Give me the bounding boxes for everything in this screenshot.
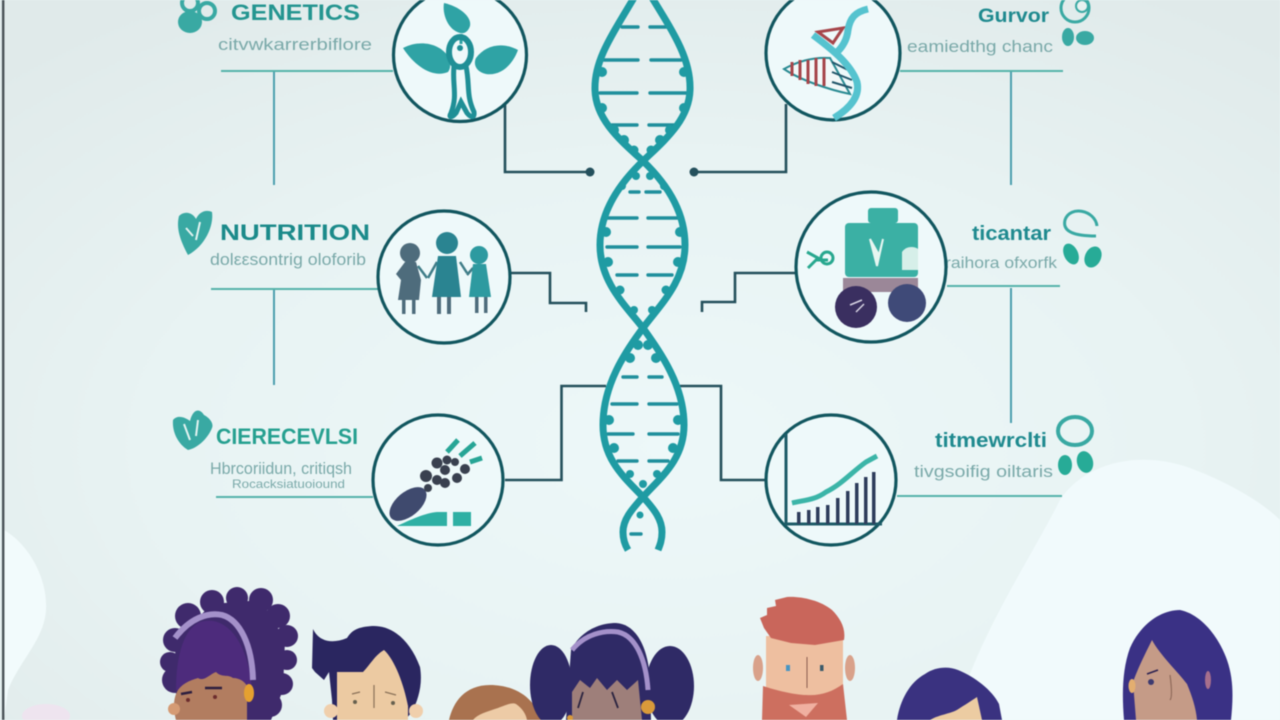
- heading: genetics: GENETICS: [231, 0, 360, 25]
- panel: bottom right label: [766, 415, 1096, 545]
- panel: genetics: [178, 0, 526, 122]
- panel: middle right label: [796, 192, 1105, 342]
- circle: family figures: [378, 211, 510, 343]
- icon: ring and leaves: [1061, 0, 1094, 46]
- background blob: left: [4, 530, 46, 720]
- person: red beard: [753, 597, 855, 720]
- icon: nutrition heart: [178, 211, 212, 255]
- background smudge: pink: [22, 704, 70, 720]
- person: dark quiff: [312, 626, 423, 720]
- heading: gurvor: Gurvor: [978, 6, 1050, 27]
- heading: ticantar: ticantar: [972, 223, 1051, 245]
- person: short dark hair: [897, 668, 1002, 720]
- icon: ring and leaves: [1060, 211, 1105, 270]
- person: two buns: [530, 623, 694, 720]
- text: description: tivgsoifig oiltaris: [914, 462, 1053, 481]
- person: long dark hair: [1123, 610, 1232, 720]
- person: curly purple hair: [160, 587, 298, 720]
- heading: ciereceulsi: CIERECEVLSI: [216, 424, 358, 449]
- icon: leafy heart: [173, 411, 213, 450]
- connector lines: [211, 71, 1063, 497]
- heading: titmewrclti: titmewrclti: [935, 430, 1047, 452]
- text: nutrition description: dolεεsontrig oloforib: [210, 250, 366, 269]
- circle: DNA ribbon: [766, 0, 900, 120]
- DNA double helix: [595, 0, 690, 550]
- text: description line two: Rocacksiatuoiound: [232, 477, 345, 491]
- text: genetics description: citvwkarrerbiflore: [218, 35, 372, 54]
- text: description: eamiedthg chanc: [907, 37, 1054, 56]
- left border: [2, 0, 4, 720]
- icon: genetics leaves: [178, 0, 215, 33]
- circle: grains and carrot: [373, 415, 503, 545]
- panel: top right label: [766, 0, 1094, 120]
- circle: plant figure: [394, 0, 526, 122]
- heading: nutrition: NUTRITION: [220, 220, 370, 245]
- background blob: right: [955, 460, 1280, 720]
- people group: [160, 587, 1232, 720]
- text: description: raihora ofxorfk: [945, 255, 1058, 272]
- circle: growth chart: [766, 415, 896, 545]
- text: description line one: Hbrcoriidun, critiqsh: [210, 459, 352, 478]
- panel: nutrition: [178, 211, 510, 343]
- circle: case and bags: [796, 192, 946, 342]
- panel: bottom left label: [173, 411, 503, 545]
- person: brown hair: [449, 685, 541, 720]
- icon: ring and leaves: [1058, 417, 1096, 475]
